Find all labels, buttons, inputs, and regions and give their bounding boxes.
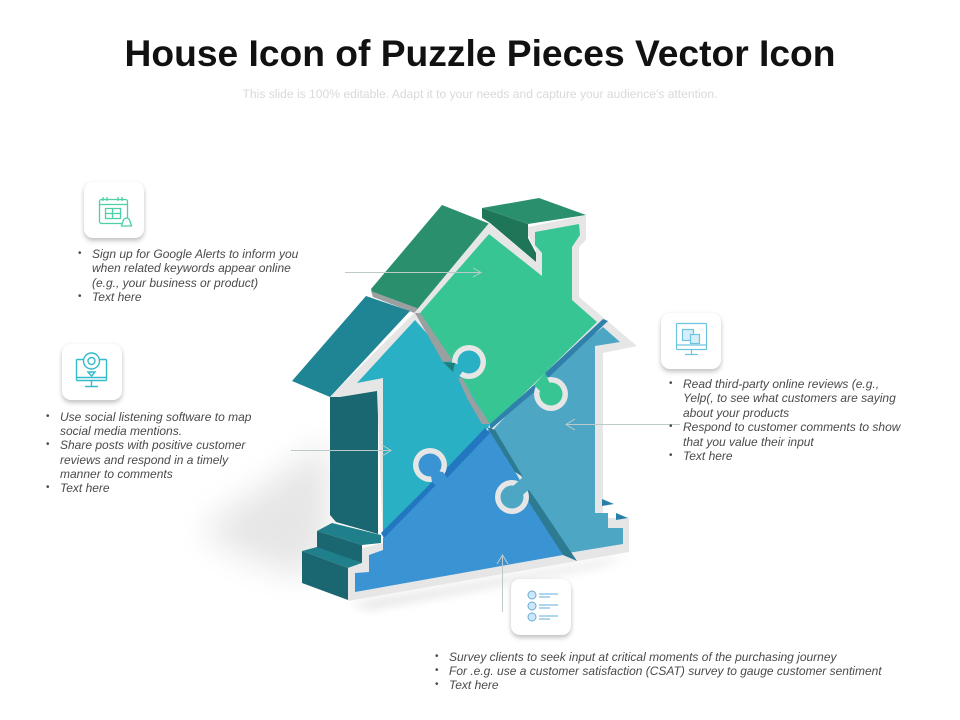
text block: social listening: Use social listening software to map — [60, 410, 251, 424]
text block: surveys: For .e.g. use a customer satisfaction (CSAT) survey to gauge customer sentiment — [449, 664, 882, 678]
puzzle joint ring: green tab — [534, 373, 568, 411]
text block: surveys — [435, 650, 882, 692]
wall side face — [330, 388, 378, 534]
dark corner triangles — [602, 499, 628, 520]
text block: Google Alerts: Text here — [92, 290, 142, 304]
text block: social listening: social media mentions. — [60, 424, 182, 438]
text block: surveys: Survey clients to seek input at critical moments of the purchasing journey — [449, 650, 837, 664]
text block: online reviews: Text here — [683, 449, 733, 463]
text block: social listening: Text here — [60, 481, 110, 495]
title: House Icon of Puzzle Pieces Vector Icon — [125, 32, 835, 74]
text block: online reviews: Read third-party online reviews (e.g., — [683, 377, 879, 391]
puzzle joint ring: blue tab — [413, 448, 447, 485]
text block: online reviews — [669, 377, 901, 463]
puzzle piece: green — [420, 224, 597, 425]
shadow — [200, 440, 630, 609]
text block: social listening: Share posts with positive customer — [60, 438, 245, 452]
text block: Google Alerts: when related keywords appear online — [92, 261, 291, 275]
text block: Google Alerts — [78, 247, 298, 304]
text block: online reviews: that you value their input — [683, 435, 814, 449]
text block: online reviews: about your products — [683, 406, 789, 420]
text block: surveys: Text here — [449, 678, 499, 692]
icon card: reviews monitor — [661, 313, 721, 369]
subtitle: This slide is 100% editable. Adapt it to your needs and capture your audience's attention. — [243, 87, 717, 101]
white house outline — [330, 215, 637, 601]
puzzle joint ring: light blue tab — [495, 477, 530, 514]
text block: social listening: manner to comments — [60, 467, 173, 481]
icon card: calendar — [84, 182, 144, 238]
text block: Google Alerts: Sign up for Google Alerts to inform you — [92, 247, 298, 261]
icon card: survey list — [511, 579, 571, 635]
text block: social listening: reviews and respond in a timely — [60, 453, 228, 467]
puzzle joint ring: teal tab — [443, 345, 486, 379]
stairs — [302, 523, 381, 600]
seams — [381, 313, 608, 561]
arrow: bottom — [497, 555, 508, 612]
arrow: left — [291, 445, 391, 456]
icon card: social listening — [62, 344, 122, 400]
text block: Google Alerts: (e.g., your business or product) — [92, 276, 258, 290]
text block: online reviews: Respond to customer comments to show — [683, 420, 900, 434]
arrow: right — [566, 419, 680, 430]
arrow: top left — [345, 268, 481, 277]
roof and chimney side faces — [292, 198, 586, 397]
puzzle piece: light blue — [493, 327, 623, 553]
puzzle piece: blue — [355, 428, 563, 592]
text block: social listening — [46, 410, 251, 495]
puzzle piece: teal — [357, 320, 490, 533]
text block: online reviews: Yelp(, to see what customers are saying — [683, 391, 896, 405]
